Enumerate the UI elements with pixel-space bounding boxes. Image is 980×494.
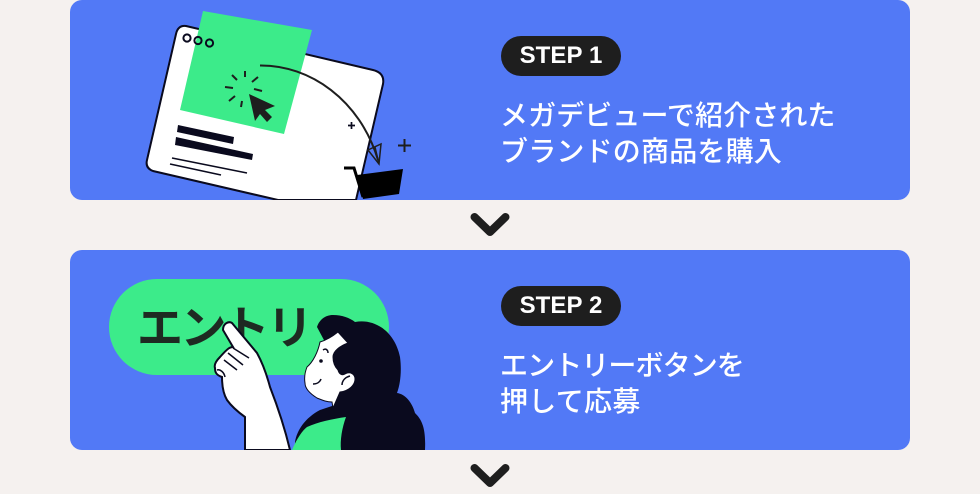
entry button: エントリ: [137, 292, 313, 358]
cursor arrow: [249, 94, 275, 122]
step 1 badge: STEP 1: [520, 42, 602, 69]
click sparks: [225, 71, 262, 107]
green square: [180, 11, 312, 134]
step 1 text: [500, 94, 836, 170]
panel: step 1: [70, 0, 910, 200]
step 2 text: エントリーボタンを: [500, 344, 744, 384]
woman shirt: [292, 417, 346, 450]
woman hair: [295, 315, 425, 450]
panel: step 2: [70, 250, 910, 450]
arrow: down chevron 1: [470, 213, 510, 236]
browser window: [147, 26, 383, 200]
text lines: [175, 125, 253, 160]
shopping cart: [344, 168, 363, 197]
entry button: [109, 279, 389, 375]
woman face: [305, 332, 355, 408]
step 1 badge: [501, 36, 621, 76]
window dots: [183, 34, 213, 47]
step 1 text: ブランドの商品を購入: [500, 130, 782, 170]
step 1 text: メガデビューで紹介された: [500, 94, 836, 134]
arrow: down chevron 2: [470, 464, 510, 487]
pointing hand and arm: [215, 322, 290, 450]
step 2 text: 押して応募: [500, 380, 641, 420]
plus marks: [348, 122, 355, 129]
illustration: browser window with cursor and cart: [146, 11, 411, 200]
curved path arrow: [260, 65, 378, 160]
step 2 text: [500, 344, 744, 420]
step 2 badge: STEP 2: [520, 292, 602, 319]
step 2 badge: [501, 286, 621, 326]
